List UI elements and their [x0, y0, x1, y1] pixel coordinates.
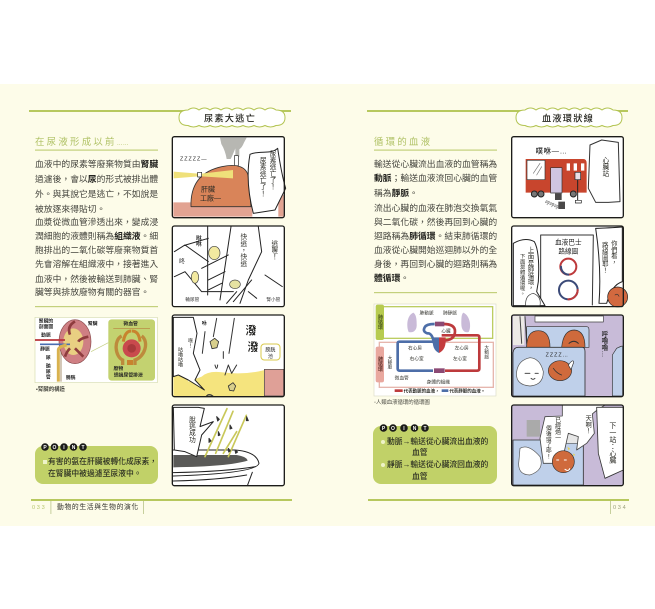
panel: next stop heart — [512, 405, 623, 486]
POINT badge: left — [41, 443, 87, 451]
circulation labels: 左心室 — [453, 355, 467, 361]
footer text: left: 033 — [32, 505, 46, 511]
POINT badge: left: P — [43, 445, 47, 451]
comic: right page panels 1-2 — [512, 137, 628, 307]
panel: liver factory: 肝臟 — [201, 185, 215, 194]
heart — [433, 337, 446, 353]
body text: left page: 外。與其說它是逃亡，不如說是 — [35, 189, 158, 199]
POINT box: left: 有害的氨在肝臟被轉化成尿素， — [48, 457, 157, 466]
header rule: left — [29, 110, 291, 112]
kidney labels: 透過尿管排泄 — [114, 372, 143, 379]
panel: bus at heart station: 噗咻—… — [536, 146, 568, 155]
body text: left page: 潤細胞的液體則稱為組織液。細 — [35, 231, 158, 241]
circulation labels: 動 — [484, 349, 489, 356]
panel: bus route map: 路線圖 — [558, 246, 579, 255]
kidney labels — [39, 317, 143, 381]
panel: liver factory: 尿素逃亡了！ — [258, 157, 266, 197]
panel: liver factory: 尿素逃亡了！ — [268, 150, 276, 190]
section heading: 循環的血液: 循環的血液 — [374, 136, 432, 147]
POINT box: right: 動脈→輸送從心臟流出血液的 — [387, 437, 488, 446]
POINT badge: right: P — [382, 426, 386, 432]
kidney labels: 腎臟的 — [39, 317, 53, 324]
POINT badge: right: O — [391, 426, 395, 432]
title badge: 血液環狀線 — [516, 108, 622, 127]
circulation labels: 肺動脈 — [420, 309, 434, 316]
body text: right page: 血液從心臟開始巡迴肺以外的全 — [374, 245, 497, 255]
panel: liver factory — [172, 137, 286, 218]
footer rules — [31, 499, 629, 514]
POINT box: right — [373, 426, 497, 484]
header rule: right — [367, 110, 628, 112]
panel: bus route map: 路線圖耶！ — [601, 240, 608, 274]
kidney labels: 微血管 — [123, 320, 138, 327]
panel: fleeing through tubes: 咻咻 — [194, 234, 201, 248]
panel: bladder splash: 膀胱 — [265, 346, 275, 353]
kidney diagram — [35, 317, 157, 383]
body text: left page: 臟等與排放廢物有關的器官。 — [35, 287, 149, 297]
circulation legend: 代表動脈的血液， — [404, 388, 440, 395]
circulation labels: 身體的組織 — [427, 378, 450, 385]
body text: left page: 血液中的尿素等廢棄物質由腎臟 — [35, 159, 158, 169]
body text: left page: 過濾後，會以尿的形式被排出體 — [35, 174, 158, 184]
panel: bladder splash — [172, 315, 284, 397]
body text: right page — [374, 159, 497, 283]
body text: right page: 體循環。 — [374, 273, 409, 283]
panel: next stop heart: 天啊！ — [584, 415, 591, 434]
lungs — [407, 313, 470, 332]
kidney labels: 膀胱 — [66, 374, 76, 381]
panel: bladder splash: 池 — [268, 353, 273, 360]
kidney labels: 腎臟 — [88, 320, 98, 327]
panel: toilet escape — [172, 405, 284, 486]
POINT box: left — [35, 446, 158, 484]
footer text: left — [32, 503, 139, 511]
footer text: right: 034 — [613, 505, 627, 511]
panel: fleeing through tubes — [172, 226, 284, 307]
body text: left page — [35, 159, 158, 297]
body text: right page: 動脈；輸送血液流回心臟的血管 — [374, 173, 497, 183]
panel: sleeping on the bus: ZZZZ… — [546, 353, 569, 359]
panel: bus route map: 你們看， — [610, 239, 617, 265]
body text: left page: 血液中，然後被輸送到肺臟、腎 — [35, 274, 158, 284]
panel: fleeing through tubes: 咚 — [179, 257, 185, 265]
panel: bladder splash: 潑 — [246, 324, 257, 337]
panel: bladder splash: 潑 — [248, 341, 259, 354]
panel: bus at heart station — [512, 137, 623, 218]
body text: right page: 迴路稱為肺循環。結束肺循環的 — [374, 231, 497, 241]
title badge: 尿素大逃亡: 尿素大逃亡 — [204, 112, 256, 124]
circulation legend — [395, 388, 485, 395]
captions: diagrams: ▪腎臟的構造 — [36, 387, 65, 393]
comic: right page panels 3-4 — [512, 315, 623, 486]
POINT badge: right: T — [423, 426, 427, 432]
POINT badge: left: O — [53, 445, 57, 451]
panel: sleeping on the bus — [512, 315, 623, 397]
circulation diagram — [374, 304, 496, 396]
comic: left page panels 3-4 — [172, 315, 284, 486]
panel: bladder splash: 噗！ — [187, 338, 193, 349]
body text: left page: 血漿從微血管滲透出來，變成浸 — [35, 217, 158, 227]
cream page background — [0, 84, 655, 526]
kidney labels: 尿 — [46, 368, 51, 375]
circulation labels: 微血管 — [395, 374, 409, 381]
body text: left page: 被放逐來得貼切。 — [35, 204, 105, 214]
POINT badge: left: T — [81, 445, 85, 451]
nephron inset — [108, 319, 155, 381]
circulation labels: 大 — [484, 344, 489, 351]
kidney labels: 管 — [46, 373, 51, 380]
POINT box: left: 在腎臟中被過濾至尿液中。 — [48, 469, 142, 478]
circulation labels: 大 — [388, 354, 393, 361]
panel: liver factory: ZZZZZ— — [180, 156, 208, 162]
circulation labels: 左心房 — [455, 344, 469, 351]
body text: right page: 身後，再回到心臟的迴路則稱為 — [374, 259, 497, 269]
circulation labels: 靜 — [388, 359, 393, 366]
body text: right page: 流出心臟的血液在肺泡交換氧氣 — [374, 203, 497, 213]
body text: right page: 輸送從心臟流出血液的血管稱為 — [374, 159, 497, 169]
body text: right page: 與二氧化碳，然後再回到心臟的 — [374, 217, 497, 227]
POINT badge: right — [380, 424, 429, 432]
panel: fleeing through tubes: 快逃，快逃 — [239, 232, 247, 268]
panel: fleeing through tubes: 腎小管 — [266, 296, 281, 303]
POINT box: right: 血管 — [412, 472, 428, 481]
panel: bladder splash: 咕嚕咕嚕 — [177, 347, 183, 369]
panel: next stop heart: 下一站：心臟 — [609, 422, 616, 465]
systemic circuit frame: 體循環 — [377, 356, 383, 373]
captions: diagrams — [36, 386, 430, 406]
panel: sleeping on the bus: 呼嚕嚕… — [600, 330, 608, 357]
panel: bus route map: 血液巴士 — [555, 237, 582, 246]
title badge: 血液環狀線: 血液環狀線 — [542, 112, 594, 124]
POINT badge: right: N — [413, 426, 417, 432]
panel: bus at heart station: 心臟站 — [601, 157, 609, 178]
heading underlines and section rules — [35, 150, 497, 307]
kidney labels: 廢物 — [113, 365, 123, 372]
panel: bus route map: 下面是體循環喔。 — [519, 253, 525, 296]
body text: left page: 胞排出的二氧化碳等廢棄物質首 — [35, 245, 158, 255]
circulation labels: 肺靜脈 — [443, 309, 457, 316]
circulation labels: 右心房 — [408, 344, 422, 351]
panel: fleeing through tubes: 輸尿管 — [185, 296, 200, 303]
captions: diagrams: ◦人類血液循環的循環圖 — [374, 400, 430, 406]
circulation labels: 右心室 — [410, 355, 424, 362]
panel: bus at heart station: 哼哼哼 — [543, 199, 560, 211]
circulation labels: 心臟 — [441, 327, 451, 334]
panel: next stop heart: 已經過一 — [554, 417, 561, 441]
body text: left page: 先會溶解在組織液中，接著進入 — [35, 259, 158, 269]
comic: left page panels 1-2 — [172, 137, 286, 307]
kidney labels: 靜脈 — [40, 345, 50, 352]
circulation legend: 代表靜脈的血液。 — [449, 388, 485, 395]
POINT badge: left: I — [63, 445, 65, 451]
pulmonary circuit frame: 肺循環 — [377, 314, 383, 331]
kidney labels: 剖面圖 — [39, 323, 53, 330]
circulation labels — [388, 309, 489, 385]
panel: bus route map — [512, 226, 628, 307]
kidney cross-section — [35, 320, 108, 382]
circulation labels: 脈 — [388, 364, 393, 371]
kidney labels: 尿 — [46, 354, 51, 361]
panel: next stop heart: 個循環了耶！ — [544, 424, 551, 459]
POINT badge: right: I — [403, 426, 405, 432]
body text: right page: 稱為靜脈。 — [374, 188, 418, 198]
POINT badge: left: N — [72, 445, 76, 451]
footer text: left: 動物的生活與生物的演化 — [57, 504, 139, 511]
vessels — [398, 324, 479, 371]
kidney labels: 輸 — [46, 363, 51, 370]
circulation labels: 脈 — [484, 353, 489, 360]
title badge: 尿素大逃亡 — [179, 108, 285, 127]
panel: bus route map: 上面是肺循環， — [526, 245, 534, 291]
panel: bladder splash: 咻 — [202, 319, 208, 327]
POINT box: right: 靜脈→輸送從心臟流回血液的 — [387, 460, 488, 469]
kidney labels: 動脈 — [41, 332, 51, 339]
panel: toilet escape: 脫逃成功 — [187, 415, 196, 444]
POINT box: right: 血管 — [412, 448, 428, 457]
panel: fleeing through tubes: 逃喔！ — [270, 239, 278, 260]
panel: liver factory: 工廠— — [200, 193, 221, 202]
section heading: 在尿液形成以前: 在尿液形成以前…… — [35, 136, 129, 147]
